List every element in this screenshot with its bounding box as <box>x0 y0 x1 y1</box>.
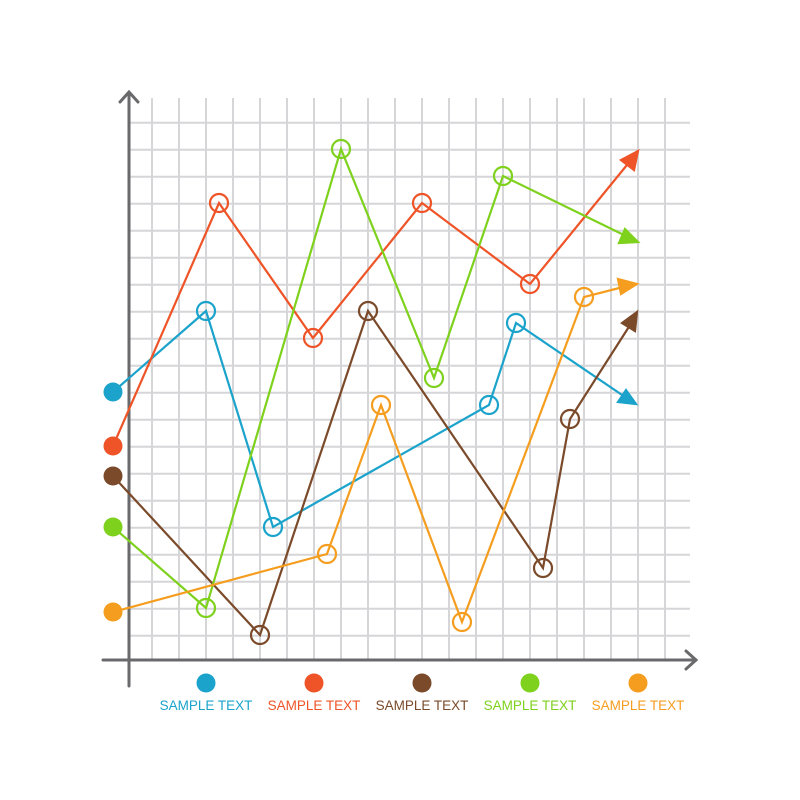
series: blue <box>104 302 636 536</box>
series: brown <box>104 302 637 644</box>
axes <box>103 92 696 686</box>
legend: SAMPLE TEXT <box>376 698 468 713</box>
series: green <box>104 140 638 617</box>
series: orange <box>104 279 637 631</box>
legend: SAMPLE TEXT <box>592 698 684 713</box>
grid <box>129 98 690 660</box>
legend: SAMPLE TEXT <box>268 698 360 713</box>
legend: SAMPLE TEXT <box>484 698 576 713</box>
legend <box>160 674 684 713</box>
legend: SAMPLE TEXT <box>160 698 252 713</box>
series: red <box>104 151 638 456</box>
